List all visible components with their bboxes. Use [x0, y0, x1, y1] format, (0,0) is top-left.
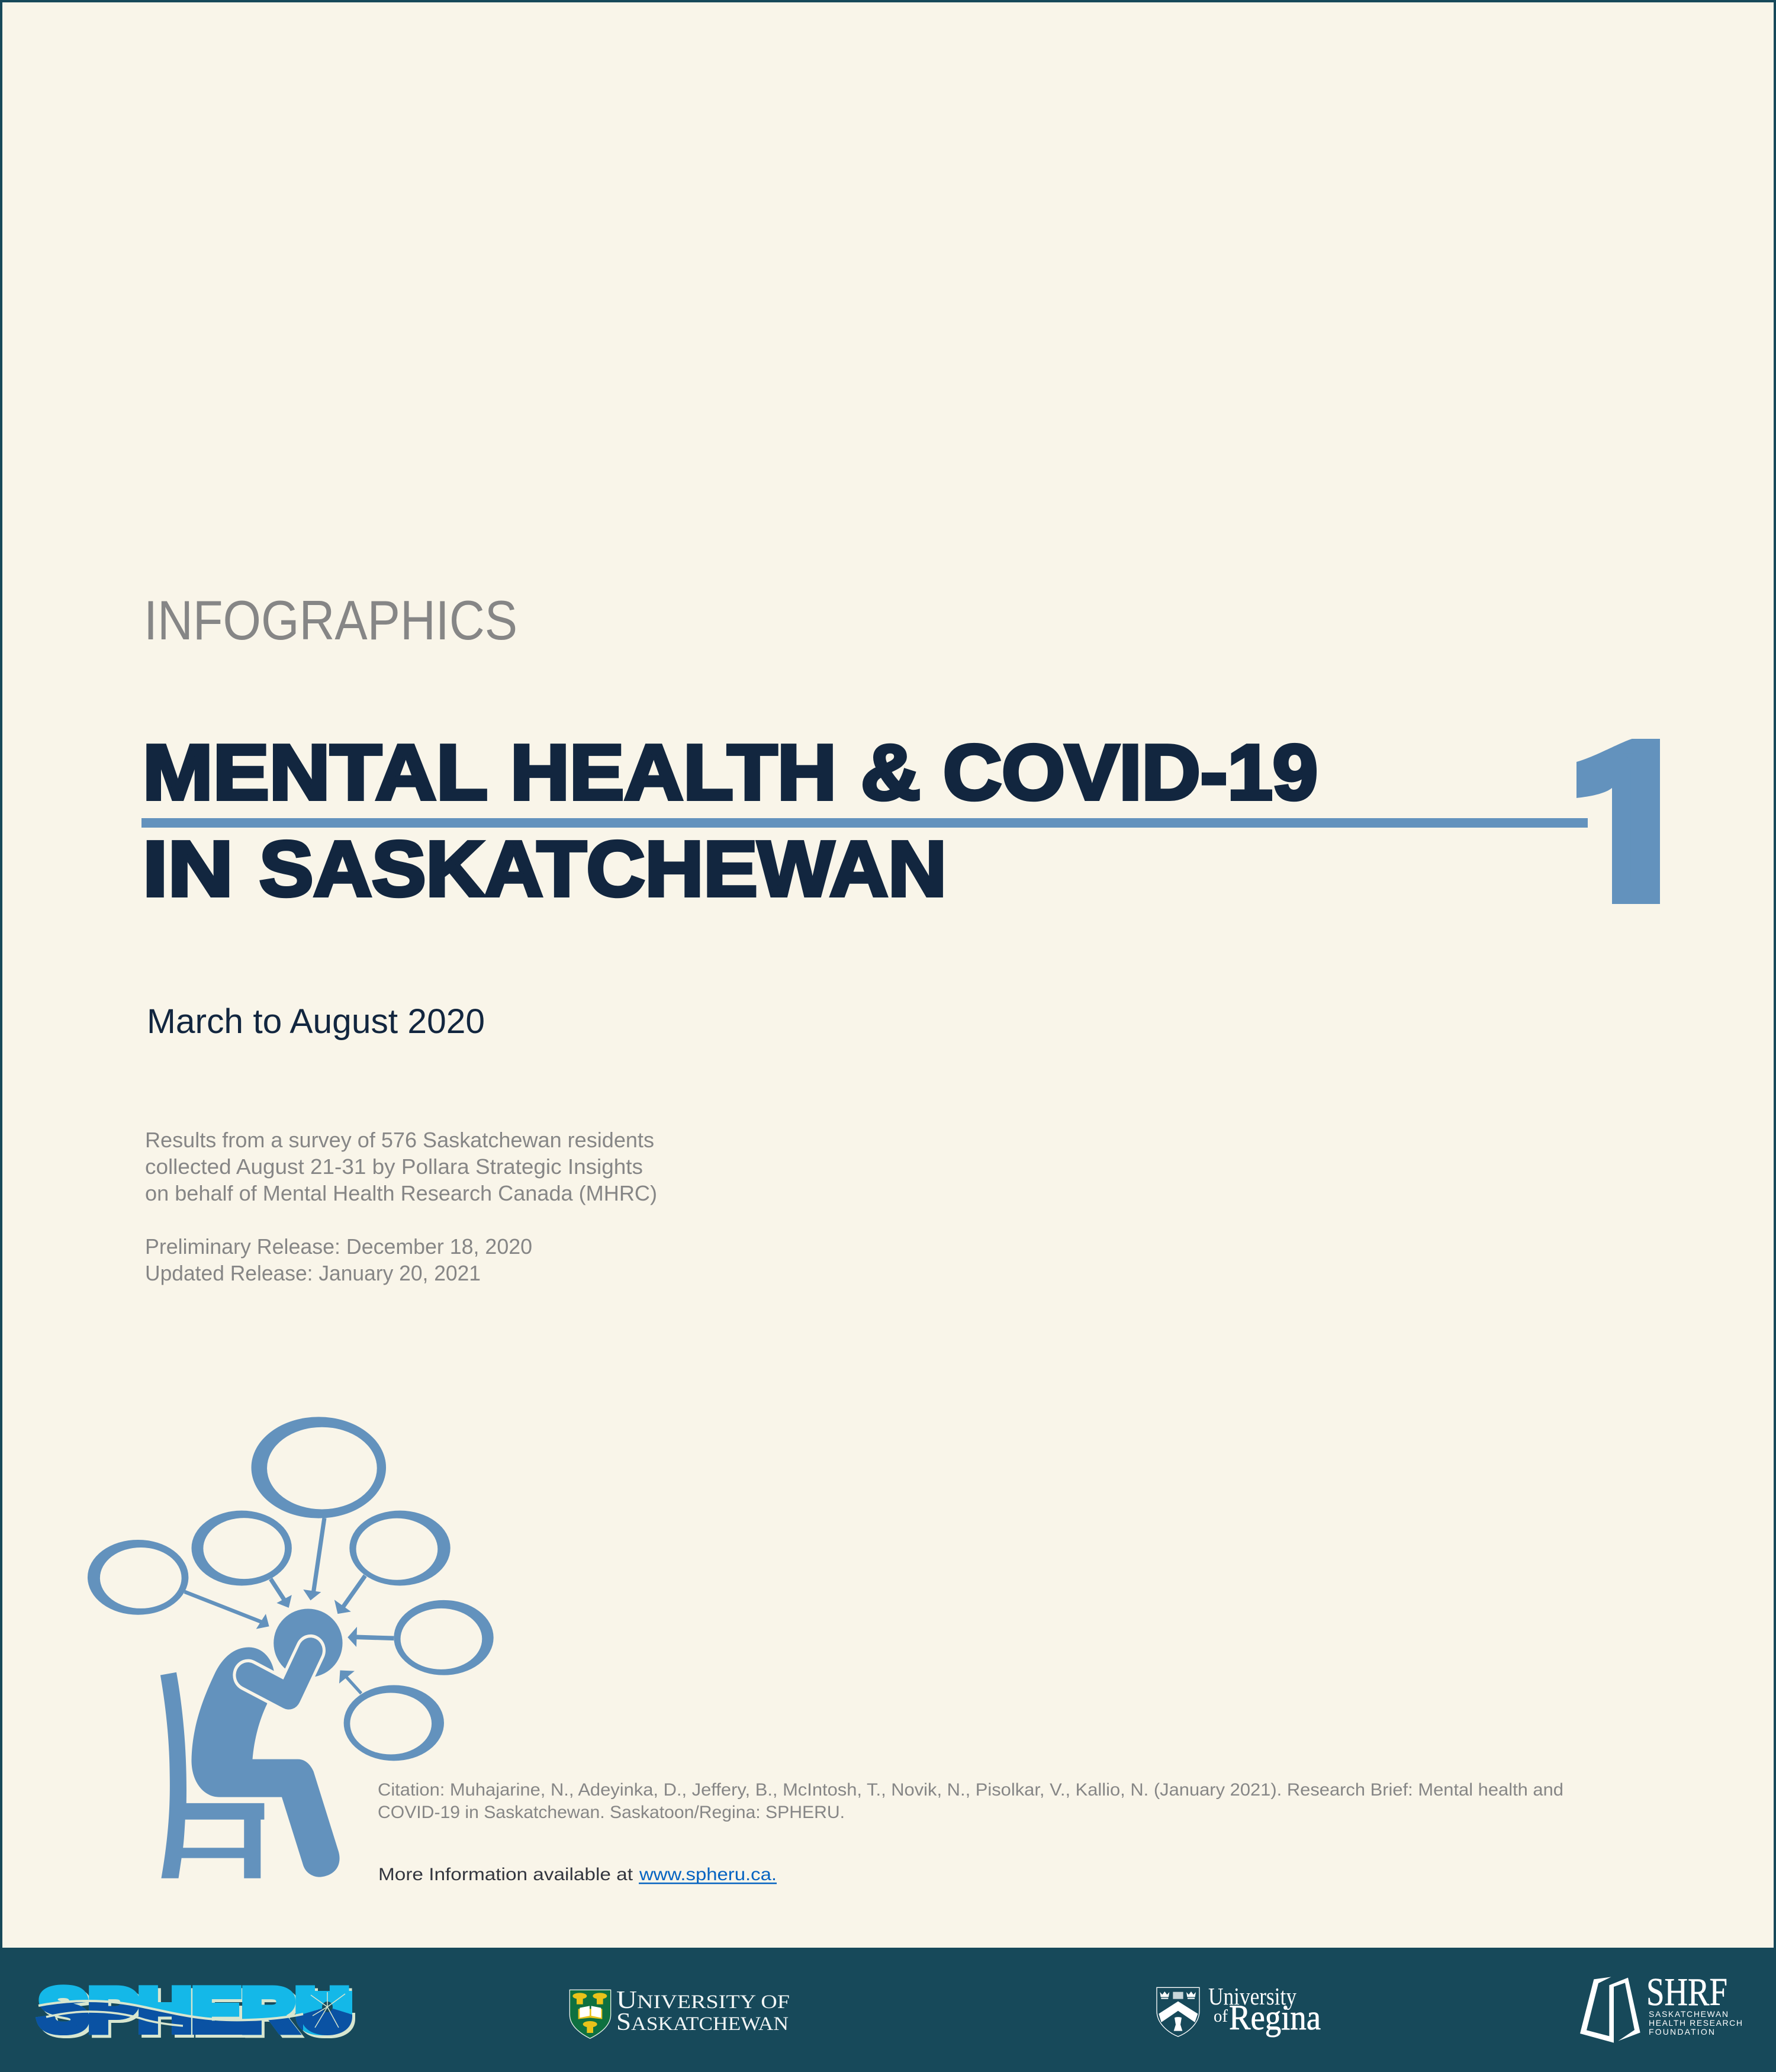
- logo: University of Saskatchewan: [570, 1987, 790, 2038]
- shield: [570, 1990, 611, 2038]
- logo: SHRF: FOUNDATION: [1649, 2027, 1714, 2036]
- logo: University of Saskatchewan: UNIVERSITY OF: [616, 1987, 790, 2014]
- date subtitle: March to August 2020: [147, 1002, 485, 1041]
- release dates: Preliminary Release: December 18, 2020: [145, 1234, 532, 1259]
- logo: University of Saskatchewan: SASKATCHEWAN: [616, 2009, 789, 2036]
- big number 1: 1: [1560, 687, 1694, 955]
- survey description: [145, 1128, 657, 1205]
- title: [143, 729, 1318, 912]
- overline: INFOGRAPHICS: INFOGRAPHICS: [144, 589, 517, 651]
- citation: Citation: Muhajarine, N., Adeyinka, D., Jeffery, B., McIntosh, T., Novik, N., Pisolkar, V., Kallio, N. (January 2021). Research Brief: Mental health and: [378, 1780, 1563, 1800]
- logo: SHRF: SHRF: [1646, 1970, 1727, 2014]
- title: MENTAL: [143, 729, 488, 816]
- icon: arrows toward head: [185, 1518, 394, 1694]
- more information line with link: www.spheru.ca.: [639, 1865, 777, 1884]
- release dates: [145, 1234, 532, 1285]
- title: &: [861, 729, 921, 816]
- logo: University of Regina: Regina: [1229, 1998, 1321, 2037]
- release dates: Updated Release: January 20, 2021: [145, 1261, 481, 1285]
- title: IN: [143, 825, 233, 912]
- more information line with link: [378, 1865, 777, 1884]
- survey description: collected August 21-31 by Pollara Strategic Insights: [145, 1154, 643, 1179]
- logo: University of Regina: of: [1214, 2006, 1228, 2026]
- citation: COVID-19 in Saskatchewan. Saskatoon/Regina: SPHERU.: [378, 1803, 845, 1822]
- title: SASKATCHEWAN: [259, 825, 947, 912]
- survey description: Results from a survey of 576 Saskatchewan residents: [145, 1128, 654, 1152]
- icon: person with intruding thoughts: [88, 1417, 494, 1878]
- logo: SPHERU: SPHERU: [38, 1976, 349, 2045]
- icon: chair: [160, 1672, 264, 1878]
- mark: [1580, 1977, 1640, 2043]
- logo: SPHERU: [36, 1984, 355, 2038]
- logo: SHRF: SASKATCHEWAN: [1649, 2009, 1728, 2019]
- logo: University of Regina: University: [1208, 1983, 1296, 2010]
- logo: SHRF: [1580, 1970, 1742, 2043]
- icon: thought bubbles: [88, 1417, 494, 1761]
- footer band: [0, 1948, 1776, 2072]
- title: HEALTH: [510, 729, 836, 816]
- survey description: on behalf of Mental Health Research Canada (MHRC): [145, 1181, 657, 1205]
- logo: SPHERU: SPHERU: [41, 1979, 352, 2048]
- title divider bar: [141, 818, 1588, 828]
- title: COVID-19: [943, 729, 1318, 816]
- logo: SPHERU: SPHERU: [38, 1976, 349, 2045]
- citation: [378, 1780, 1563, 1822]
- more information line with link: More Information available at: [378, 1865, 633, 1884]
- logo: SHRF: HEALTH RESEARCH: [1649, 2018, 1742, 2028]
- icon: seated figure: [191, 1608, 343, 1877]
- shield: [1157, 1987, 1199, 2036]
- logo: University of Regina: [1157, 1983, 1321, 2037]
